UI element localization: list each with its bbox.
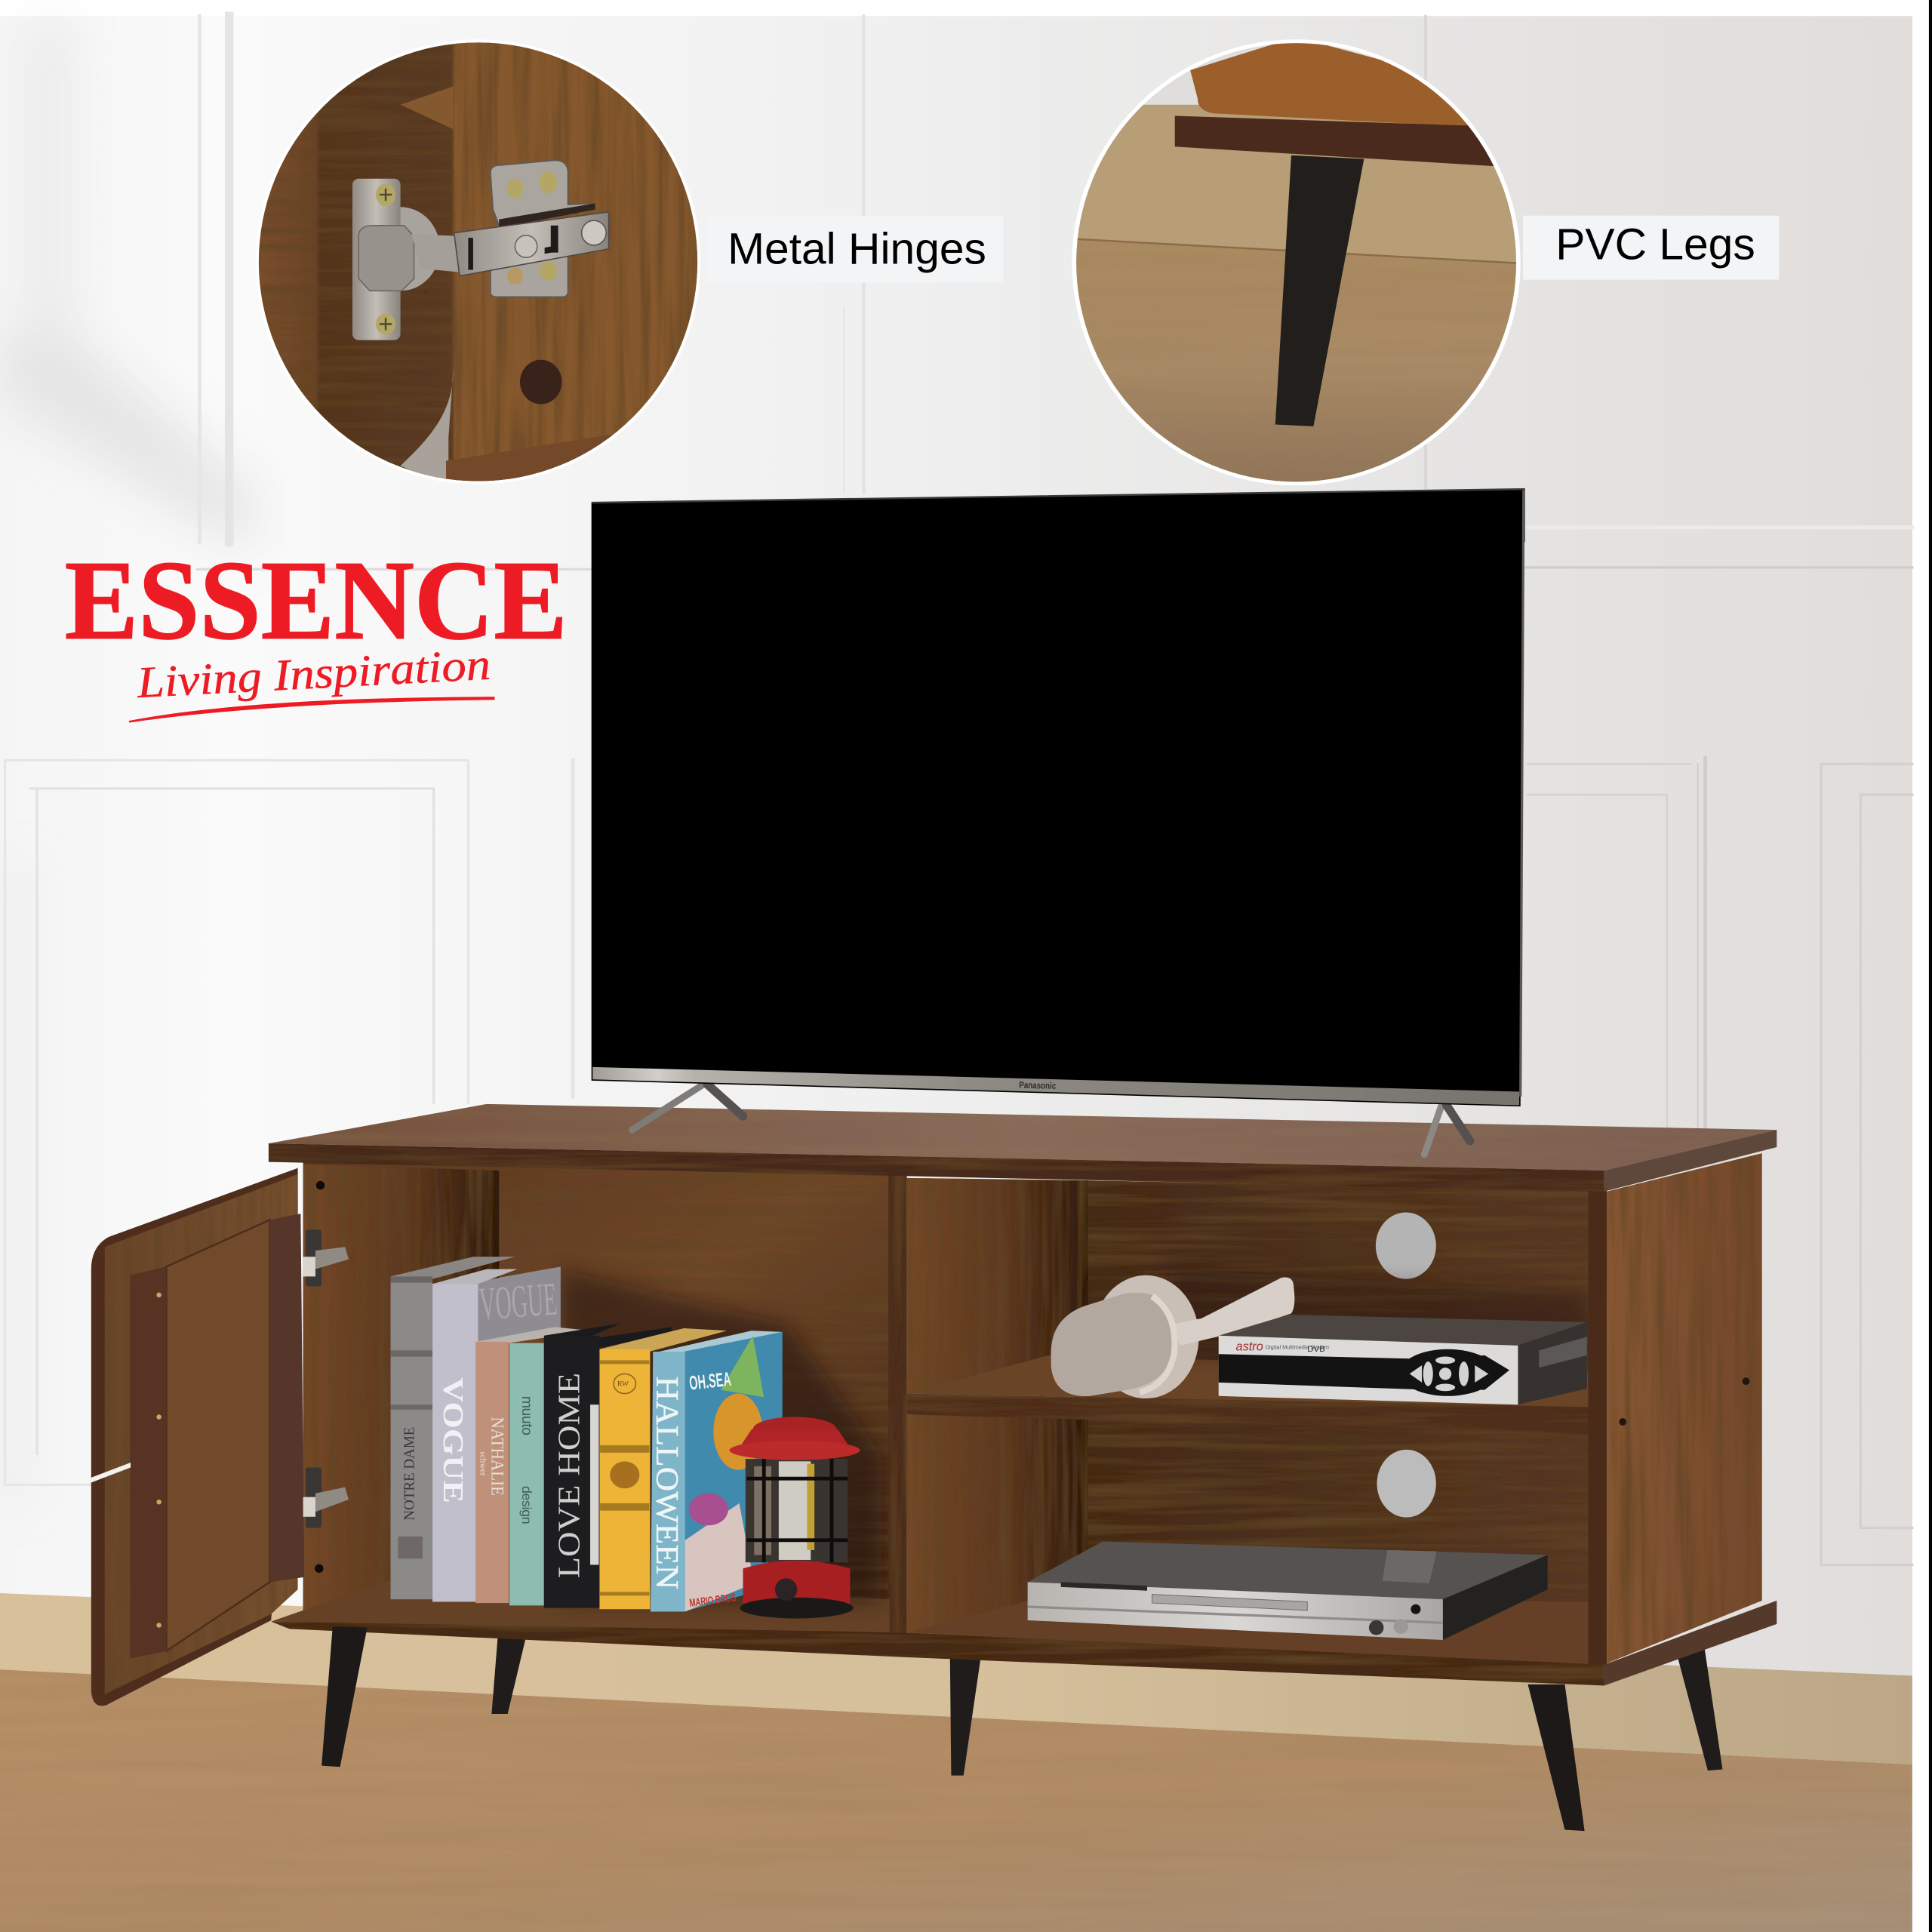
black book love home: LOVE HOME [552, 1373, 586, 1578]
bottom edge of right side [1604, 1601, 1777, 1685]
yellow book [599, 1328, 727, 1609]
front legs [321, 1626, 1585, 1831]
bottom shelf front edge [271, 1622, 1604, 1685]
label: pvc legs [1523, 216, 1780, 280]
bottom shelf top left [271, 1581, 890, 1632]
satellite receiver: DVB [1307, 1345, 1325, 1354]
cabinet top front edge [269, 1143, 1604, 1192]
tv body [592, 489, 1524, 1106]
salmon book nathalie [475, 1327, 592, 1603]
detail circle: pvc legs [1072, 37, 1523, 488]
left inner side wall [303, 1164, 499, 1614]
back panel right [1084, 1180, 1592, 1666]
label: metal hinges: Metal Hinges [728, 224, 986, 273]
compartment left panel upper [907, 1178, 1088, 1394]
gap at the bottom of the door [401, 368, 454, 487]
compartment left panel lower [907, 1414, 1088, 1632]
plastic screw cover [520, 360, 561, 405]
gray book notre dame: NOTRE DAME [402, 1427, 418, 1521]
floor [0, 1669, 1912, 1932]
cable hole lower [1377, 1450, 1436, 1518]
hinge arm [411, 212, 609, 276]
lower hinge [303, 1467, 349, 1527]
teal book muuto: design [519, 1486, 534, 1524]
right side panel [1607, 1153, 1762, 1663]
lantern [730, 1417, 860, 1618]
tv stand right [1424, 1105, 1470, 1155]
cabinet top surface [269, 1104, 1777, 1171]
satellite receiver [1219, 1315, 1587, 1404]
door inner panel [166, 1220, 270, 1651]
shadow behind books [561, 1269, 881, 1601]
rear legs [491, 1636, 1722, 1776]
cleat screws [156, 1293, 162, 1628]
tapered leg [1275, 155, 1364, 426]
television [592, 489, 1524, 1155]
middle shelf front [907, 1394, 1589, 1434]
black book love home [544, 1323, 672, 1608]
blue book halloween: OH.SEA [688, 1367, 732, 1395]
teal book muuto [509, 1343, 544, 1605]
label: metal hinges [706, 216, 1004, 283]
satellite receiver: Digital Multimedia System [1266, 1344, 1329, 1351]
hinge base plate [352, 179, 440, 340]
window shadow [0, 25, 259, 1503]
middle shelf top [907, 1355, 1589, 1407]
cabinet top right edge [1604, 1130, 1777, 1192]
door gap [89, 1463, 131, 1484]
salmon book nathalie: NATHALIE [488, 1417, 506, 1496]
gray book notre dame [391, 1257, 515, 1599]
blue book halloween: HALLOWEEN [649, 1377, 685, 1589]
headphones [1051, 1275, 1294, 1398]
center divider [888, 1174, 907, 1634]
lavender book vogue [432, 1266, 561, 1601]
logo: essence: ESSENCE [65, 538, 568, 663]
right column inner edge [1588, 1188, 1607, 1665]
baseboard [0, 1593, 1912, 1764]
wall trim lines [5, 16, 1912, 1564]
satellite receiver: astro [1236, 1340, 1263, 1353]
tv bezel [592, 1067, 1519, 1105]
dvd player [1028, 1541, 1548, 1640]
lavender book vogue: VOGUE [437, 1377, 468, 1503]
upper hinge [303, 1229, 349, 1286]
cabinet base board [1175, 115, 1497, 166]
cabinet hinges [303, 1181, 349, 1573]
teal book muuto: muuto [518, 1396, 535, 1435]
blue book halloween [649, 1331, 783, 1612]
right edge line [1929, 0, 1932, 1932]
back panel left [303, 1162, 906, 1638]
cabinet [269, 1104, 1777, 1831]
cable hole upper [1376, 1213, 1436, 1279]
tv brand: Panasonic [1019, 1080, 1057, 1091]
side panel pegs [1619, 1377, 1749, 1426]
books: VOGUE [478, 1274, 558, 1331]
bottom shelf top right [907, 1595, 1589, 1665]
shadow behind receiver [1171, 1269, 1589, 1367]
yellow book: RW [617, 1380, 629, 1389]
logo: essence [65, 538, 568, 723]
door left cleat [130, 1266, 166, 1659]
salmon book nathalie: schwer [478, 1451, 488, 1476]
cabinet side [1190, 37, 1478, 127]
door right cleat [270, 1214, 304, 1582]
detail circle: metal hinges [253, 37, 703, 493]
door outer face [91, 1168, 298, 1706]
books [391, 1257, 783, 1612]
tv stand left [632, 1084, 743, 1130]
cabinet door [89, 1168, 304, 1706]
logo: essence: Living Inspiration [135, 640, 491, 707]
label: pvc legs: PVC Legs [1555, 220, 1755, 269]
hinge door plate [491, 160, 595, 297]
blue book halloween: MARIO BROS [689, 1592, 737, 1610]
